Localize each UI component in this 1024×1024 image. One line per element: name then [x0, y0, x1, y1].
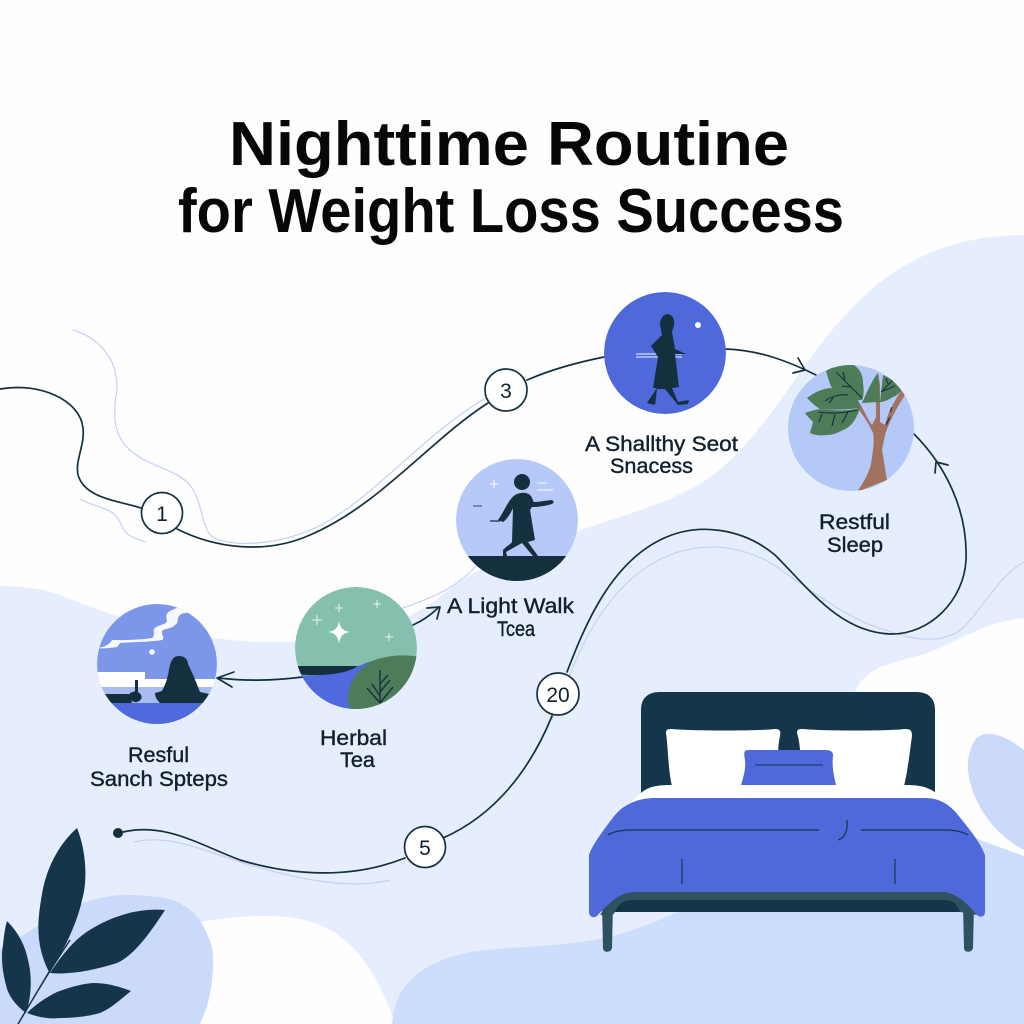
title: [178, 110, 844, 246]
label: Restful Sleep: [819, 510, 890, 557]
background wave: pale blue: [0, 235, 1024, 1024]
route: step 20 to step 5: [443, 716, 552, 838]
arrow: herbal tea to walk: [413, 607, 440, 625]
route: step 1 to step 3: [177, 403, 488, 547]
label: A Shallthy Seot Snacess: A Shallthy Seot: [585, 432, 738, 456]
route: step 3 to walker: [527, 357, 604, 380]
background blob: blue right: [968, 734, 1024, 850]
blanket: [589, 798, 985, 917]
step node 5: 5: [419, 837, 431, 860]
leaf sprig: [2, 828, 165, 1024]
label: Herbal Tea: Herbal: [320, 726, 387, 750]
step node 1: [142, 492, 182, 534]
bed sheet: [632, 785, 944, 802]
background blob: blue lower left: [0, 895, 213, 1024]
arrow: herbal tea to resting: [217, 672, 303, 687]
blanket stitching: [608, 820, 968, 884]
icon: tree circle: [788, 364, 914, 492]
route: step 5 to start dot: [113, 828, 405, 873]
background blob: white lower left: [190, 916, 395, 1024]
background blob: white right: [850, 618, 1024, 856]
label: Restful Sleep: Restful: [819, 510, 890, 534]
faint decorative paths: [73, 330, 1024, 884]
bed headboard: [641, 692, 935, 800]
label: Resful Sanch Spteps: Resful: [128, 743, 189, 767]
label: Herbal Tea: [320, 726, 387, 772]
label: A Shallthy Seot Snacess: [585, 432, 738, 478]
background blob: blue lower right: [392, 820, 1024, 1024]
step node 3: [485, 369, 527, 411]
label: A Light Walk Tea: A Light Walk: [447, 594, 574, 618]
bed frame: [612, 895, 964, 912]
route: walker to tree with arrow: [725, 349, 816, 375]
label: Resful Sanch Spteps: Sanch Spteps: [90, 767, 228, 791]
step node 3: 3: [500, 380, 512, 403]
pillow left: [666, 729, 780, 786]
icon: herbal tea circle: [290, 587, 420, 712]
step node 5: [404, 826, 446, 868]
step node 20: 20: [546, 684, 570, 707]
small blue pillow: [741, 750, 836, 785]
label: Herbal Tea: Tea: [340, 748, 375, 772]
pillow right: [797, 729, 912, 786]
label: Restful Sleep: Sleep: [827, 533, 883, 557]
step node 1: 1: [156, 503, 168, 526]
title: Nighttime Routine: [229, 110, 789, 179]
label: A Light Walk Tea: Tcea: [497, 617, 535, 641]
bed: [589, 692, 985, 952]
route: path from start to step 3: [0, 387, 141, 508]
title: for Weight Loss Success: [178, 177, 844, 246]
label: A Light Walk Tea: [447, 594, 574, 641]
icon: resting silhouette circle: [97, 604, 217, 724]
icon: walking figure circle: [450, 459, 580, 586]
label: A Shallthy Seot Snacess: Snacess: [610, 454, 693, 478]
route: tree loop to step 20: [567, 434, 966, 672]
bed legs: [602, 905, 974, 952]
step node 20: [537, 673, 579, 715]
label: Resful Sanch Spteps: [90, 743, 228, 791]
icon: walking figure dark circle: [604, 292, 726, 414]
